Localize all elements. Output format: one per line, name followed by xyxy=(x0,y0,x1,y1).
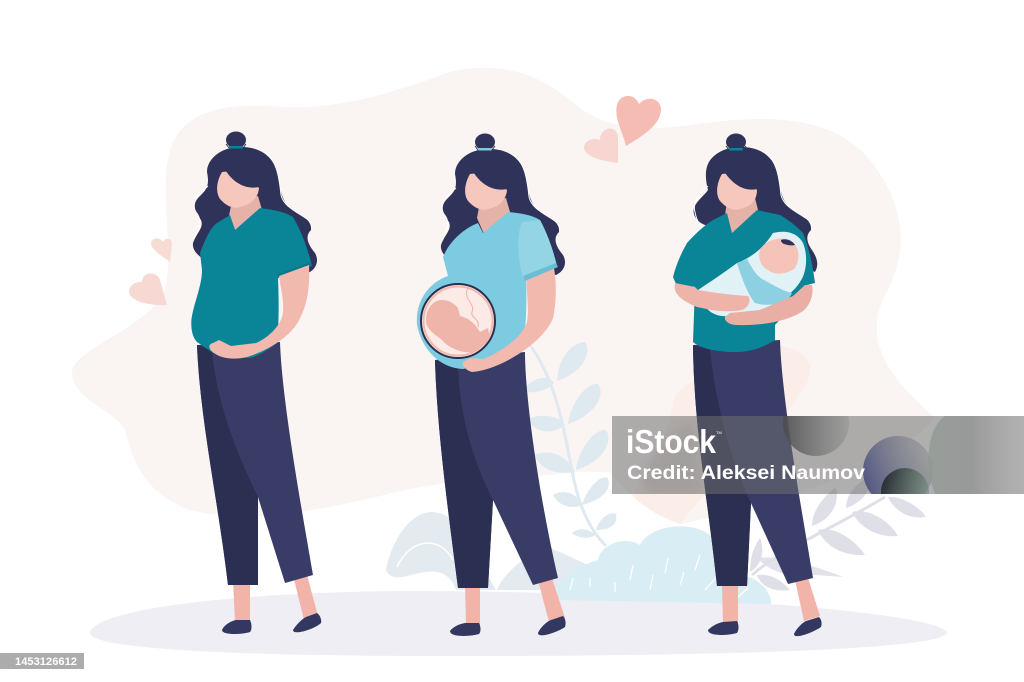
hair bun xyxy=(726,134,746,150)
shirt cuff xyxy=(523,263,558,281)
near arm xyxy=(675,283,750,311)
image id tag: 1453126612 xyxy=(15,656,77,668)
arm and hand xyxy=(209,265,309,359)
legs and shoes xyxy=(222,575,321,634)
hair xyxy=(441,149,565,275)
hair xyxy=(694,147,817,272)
fetus xyxy=(426,300,490,352)
hair highlights xyxy=(194,152,312,238)
fringe xyxy=(723,156,762,190)
face xyxy=(217,170,259,208)
figure 3: mother holding baby xyxy=(673,134,822,636)
watermark band xyxy=(612,416,1024,494)
hair bun xyxy=(226,132,246,148)
figure 2: pregnant woman with fetus xyxy=(417,134,566,636)
head xyxy=(759,238,798,274)
hair highlights xyxy=(442,154,560,240)
sleeve xyxy=(518,220,557,279)
trousers xyxy=(693,340,813,586)
trousers xyxy=(197,342,313,585)
background blob xyxy=(72,68,935,524)
plant: big pale leaves xyxy=(386,512,600,590)
shirt cuff xyxy=(278,262,312,278)
face xyxy=(465,172,507,210)
hair xyxy=(193,147,317,273)
heart: large top xyxy=(616,96,661,146)
figure 1: pregnant woman in teal shirt xyxy=(191,132,321,634)
trousers xyxy=(435,352,558,588)
womb circle with fetus xyxy=(421,284,495,358)
baby hair xyxy=(781,239,795,245)
far arm xyxy=(725,285,813,325)
heart: small top xyxy=(584,128,618,163)
hair bun xyxy=(475,134,495,150)
hair highlights xyxy=(694,152,812,230)
ground shadow xyxy=(90,591,947,656)
blurred watermark shapes xyxy=(646,416,998,494)
swaddle band xyxy=(737,259,792,305)
plant: blue bush xyxy=(555,526,771,604)
shirt xyxy=(673,210,815,352)
plant: grey branch xyxy=(750,475,926,590)
neck xyxy=(725,198,758,234)
image id tag xyxy=(0,653,84,669)
legs and shoes xyxy=(450,578,566,636)
blanket xyxy=(698,232,806,316)
shirt xyxy=(191,208,312,358)
face xyxy=(717,172,757,210)
credit text: Credit: Aleksei Naumov xyxy=(627,462,865,484)
neck xyxy=(229,196,262,232)
plant: central stem with leaves xyxy=(523,342,616,546)
trademark: TM xyxy=(716,430,722,435)
neck xyxy=(477,198,510,234)
arm and hand xyxy=(463,268,556,372)
fringe xyxy=(472,156,512,190)
heart: small left upper xyxy=(151,238,172,262)
heart: small left lower xyxy=(129,273,167,305)
iStock logo text: iStock xyxy=(626,423,717,460)
umbilical cord xyxy=(466,288,478,327)
fringe xyxy=(224,154,264,188)
baby xyxy=(698,232,806,316)
shirt xyxy=(417,212,557,369)
legs and shoes xyxy=(708,578,822,636)
pink blob behind third figure xyxy=(632,345,810,524)
